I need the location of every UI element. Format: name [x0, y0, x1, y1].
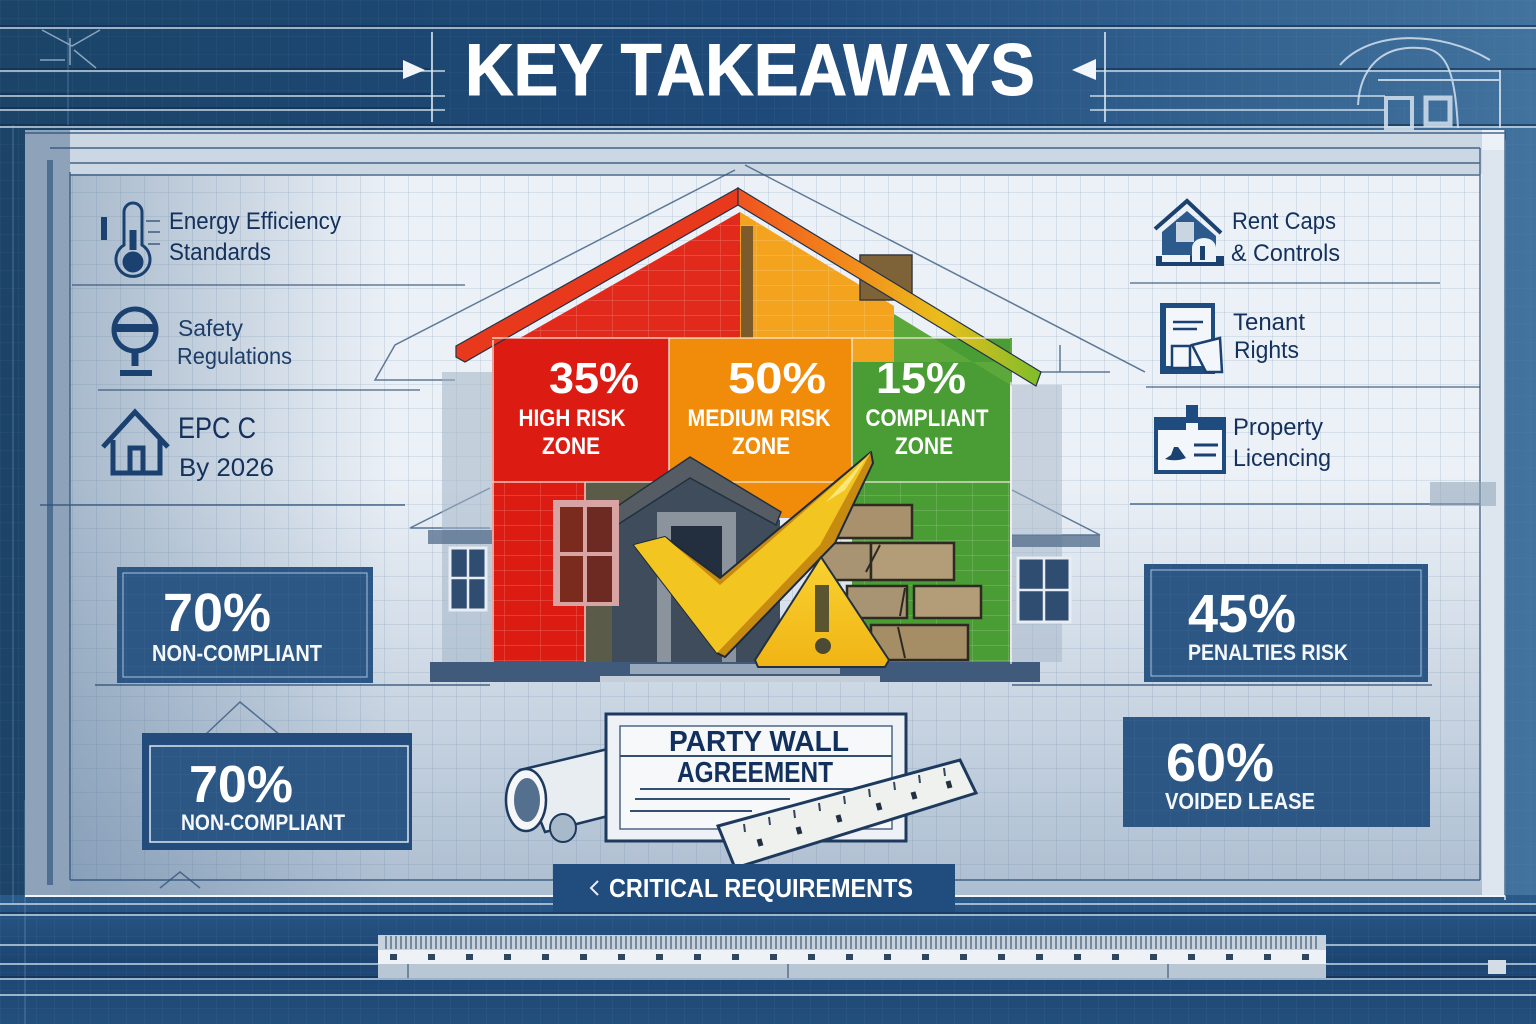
- text: safety regulations: Regulations: [177, 343, 292, 369]
- label: 15 percent compliant zone: COMPLIANT: [866, 405, 989, 432]
- stat box: 60 percent voided lease: 60%: [1166, 733, 1274, 793]
- label: 50 percent medium risk zone: MEDIUM RISK: [688, 405, 831, 432]
- sketched background houses and roof lines: [160, 165, 1145, 888]
- icon: EPC house: [103, 412, 168, 473]
- ground band under house: [430, 662, 1040, 682]
- stat box: 70 percent non-compliant upper: 70%: [163, 583, 271, 643]
- icon: sketched house top right: [1340, 38, 1500, 128]
- stat box: 70 percent non-compliant upper: [117, 567, 373, 683]
- label: 15 percent compliant zone: ZONE: [895, 433, 953, 460]
- label: 50 percent medium risk zone: ZONE: [732, 433, 790, 460]
- icon: ruler: [718, 760, 976, 868]
- green zone wall: [852, 338, 1010, 662]
- banner: critical requirements: [553, 864, 955, 912]
- stat box: 70 percent non-compliant upper: NON-COMPLIANT: [152, 640, 322, 666]
- icon: rent caps house: [1155, 201, 1224, 266]
- icon: property licence card: [1156, 405, 1224, 472]
- main blueprint panel: [25, 130, 1505, 896]
- label: 35 percent high risk zone: HIGH RISK: [518, 405, 626, 432]
- gable: orange side: [740, 212, 894, 362]
- party wall agreement document: PARTY WALL: [669, 726, 849, 758]
- text: energy efficiency standards: Energy Efficiency: [169, 208, 341, 235]
- stat box: 60 percent voided lease: [1123, 717, 1430, 827]
- icon: sketched star top left: [40, 30, 100, 68]
- gable: green side: [894, 314, 1012, 386]
- icon: thermometer: [104, 203, 160, 276]
- right list: regulations: [1155, 201, 1340, 472]
- label: 35 percent high risk zone: 35%: [549, 354, 639, 403]
- text: tenant rights: Rights: [1234, 337, 1299, 364]
- brick texture lower: [492, 482, 1010, 662]
- zone divider lines: [492, 338, 1011, 664]
- party wall agreement document: AGREEMENT: [677, 757, 833, 789]
- text: property licencing: Licencing: [1233, 445, 1331, 472]
- lower wall shading: [585, 482, 705, 662]
- label: 15 percent compliant zone: 15%: [876, 354, 966, 403]
- red zone wall: [492, 338, 669, 662]
- text: rent caps and controls: & Controls: [1231, 240, 1340, 267]
- brick stack: [819, 505, 981, 660]
- text: energy efficiency standards: Standards: [169, 239, 271, 266]
- divider lines between list rows: [72, 283, 1480, 390]
- label: 50 percent medium risk zone: [688, 354, 831, 460]
- icon: rolled blueprint: [506, 748, 612, 842]
- footer ruler: [378, 935, 1506, 978]
- stat box: 45 percent penalties risk: [1144, 564, 1428, 682]
- chimney: [860, 255, 912, 300]
- stat box: 70 percent non-compliant lower: NON-COMPLIANT: [181, 810, 345, 835]
- roof: [456, 188, 1041, 386]
- label: 50 percent medium risk zone: 50%: [728, 354, 826, 403]
- text: safety regulations: Safety: [178, 315, 243, 341]
- stat box: 70 percent non-compliant lower: [142, 733, 412, 850]
- text: rent caps and controls: Rent Caps: [1232, 208, 1336, 235]
- text: tenant rights: Tenant: [1233, 309, 1305, 336]
- brick seam: [741, 226, 753, 338]
- warning triangle: [755, 557, 889, 667]
- gable: red side: [520, 212, 740, 338]
- label: 35 percent high risk zone: ZONE: [542, 433, 600, 460]
- stat box: 45 percent penalties risk: PENALTIES RISK: [1188, 640, 1348, 665]
- header: title: KEY TAKEAWAYS: [465, 30, 1035, 111]
- label: 35 percent high risk zone: [518, 354, 639, 460]
- text: property licencing: Property: [1233, 414, 1323, 441]
- orange zone wall: [669, 338, 852, 518]
- text: EPC C by 2026: By 2026: [179, 454, 274, 482]
- text: EPC C by 2026: EPC C: [178, 412, 256, 445]
- left list: regulations: [103, 203, 341, 482]
- banner: critical requirements: CRITICAL REQUIREMENTS: [609, 873, 913, 903]
- icon: tenant rights document: [1160, 303, 1222, 374]
- icon: safety gauge: [114, 309, 156, 373]
- neighbouring wall left: [428, 372, 492, 662]
- stat box: 70 percent non-compliant lower: 70%: [189, 756, 293, 814]
- stat box: 45 percent penalties risk: 45%: [1188, 584, 1296, 644]
- label: 15 percent compliant zone: [866, 354, 989, 460]
- small house with window and door: [553, 457, 781, 662]
- neighbouring wall right: [1012, 385, 1100, 662]
- party wall agreement document: [506, 714, 976, 868]
- house: risk zones: [456, 188, 1041, 667]
- check mark: [634, 452, 873, 657]
- stat box: 60 percent voided lease: VOIDED LEASE: [1165, 788, 1315, 814]
